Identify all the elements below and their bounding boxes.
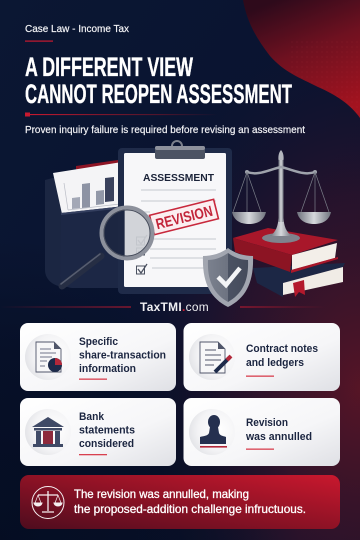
category label: Case Law - Income Tax	[25, 24, 129, 35]
brand line: TaxTMI.com	[140, 302, 209, 314]
title	[25, 52, 292, 109]
panel: revision was annulled	[184, 398, 340, 466]
callout: conclusion banner: The revision was annulled, making	[74, 487, 249, 501]
checkboxes	[136, 235, 147, 274]
panel: contract notes and ledgers: Contract notes	[246, 343, 318, 355]
panel: bank statements considered: Bank	[79, 411, 105, 423]
chart sheet	[53, 162, 124, 214]
category underline	[25, 40, 53, 42]
text lines	[141, 190, 216, 268]
title: A DIFFERENT VIEW	[25, 52, 193, 82]
title rule	[25, 112, 218, 116]
callout: conclusion banner	[20, 475, 340, 529]
icon: document with pen	[200, 342, 231, 373]
icon: document with pie	[36, 342, 62, 372]
illustration: scales and books	[232, 150, 345, 297]
icon: scales in circle	[32, 486, 64, 518]
illustration: magnifying glass	[61, 208, 152, 286]
panel: contract notes and ledgers: and ledgers	[246, 357, 304, 369]
panel: specific share-transaction information: Specific	[79, 336, 118, 348]
subtitle: Proven inquiry failure is required before revising an assessment	[25, 124, 305, 136]
panel: revision was annulled: Revision	[246, 417, 288, 429]
panel: specific share-transaction information: information	[79, 363, 136, 375]
paper	[124, 153, 226, 287]
panel: bank statements considered: considered	[79, 438, 134, 450]
heading on paper: ASSESSMENT	[143, 172, 215, 184]
illustration: shield with check	[203, 248, 253, 307]
panel: bank statements considered: statements	[79, 424, 135, 436]
red book	[233, 228, 338, 273]
clip	[155, 141, 205, 159]
panel: specific share-transaction information	[20, 323, 176, 391]
decorative red wave	[243, 0, 360, 118]
icon: rubber stamp	[200, 415, 227, 448]
panel: bank statements considered	[20, 398, 176, 466]
panel: contract notes and ledgers	[184, 323, 340, 391]
navy book	[253, 263, 345, 297]
illustration: folder with chart	[45, 160, 125, 288]
scales	[232, 150, 331, 243]
illustration: clipboard	[118, 141, 232, 294]
icon: bank building	[32, 417, 64, 447]
panel: revision was annulled: was annulled	[245, 431, 312, 443]
callout: conclusion banner: the proposed-addition challenge infructuous.	[74, 502, 306, 516]
panel: specific share-transaction information: share-transaction	[79, 350, 166, 362]
revision stamp: REVISION	[154, 203, 214, 233]
